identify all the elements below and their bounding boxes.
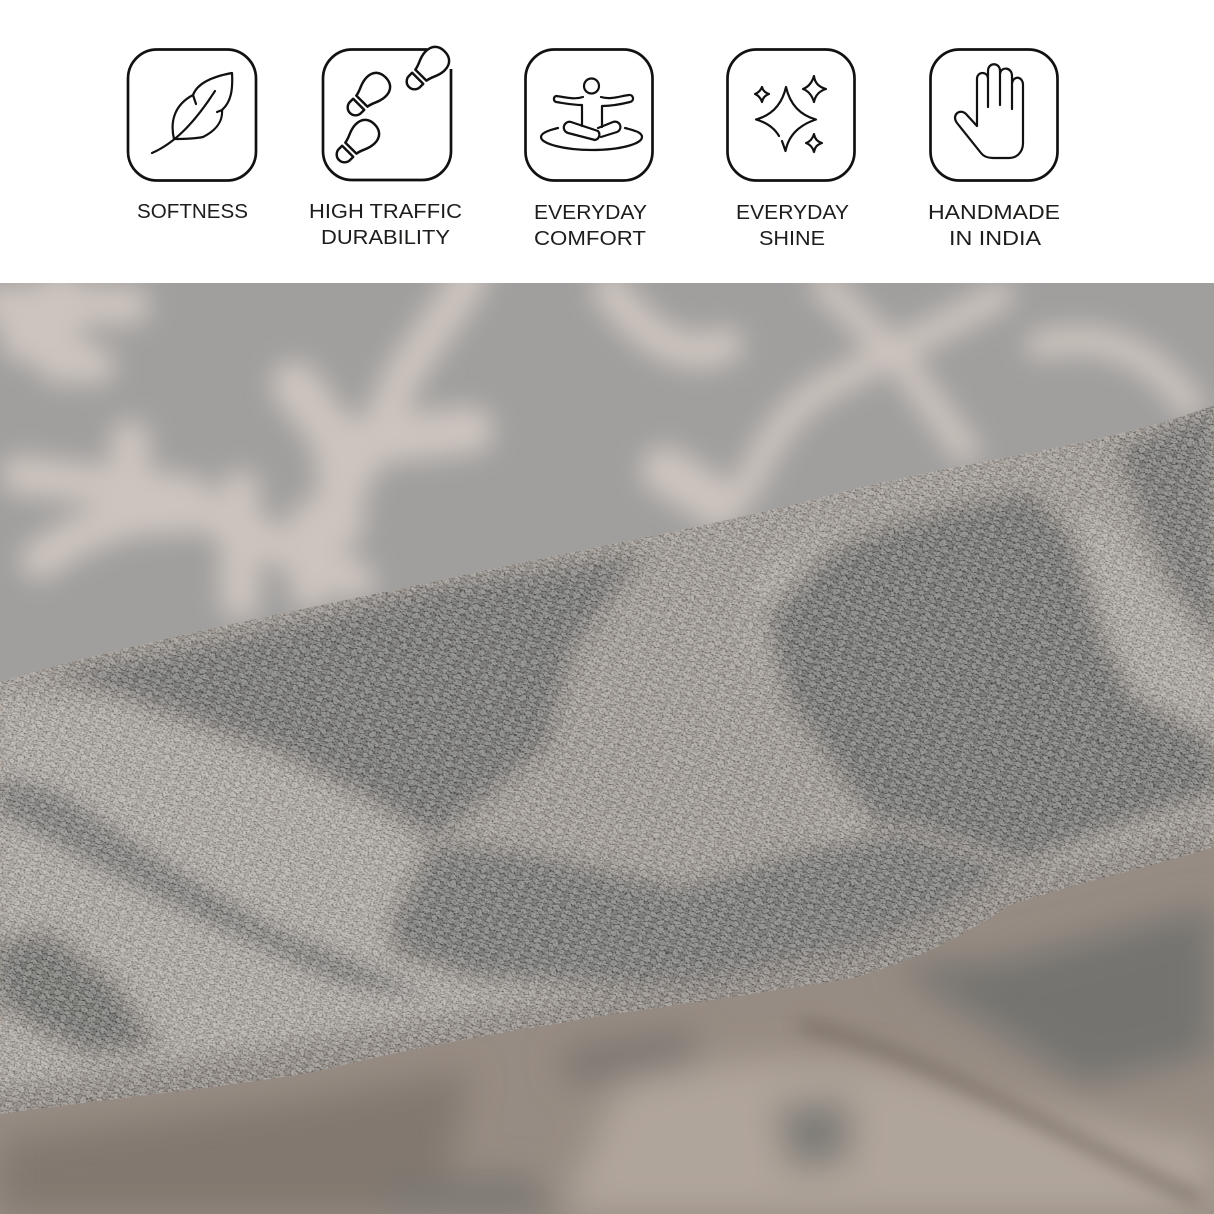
label: softness: SOFTNESS [137,200,248,223]
label: everyday comfort: EVERYDAY [534,201,647,224]
rug gray diagonal band [395,835,1010,985]
icon: meditating figure [541,78,642,150]
icon group: softness [128,50,256,223]
rug gray upper right [1120,410,1214,640]
icon: feather [152,73,232,153]
lower blurred fold [0,847,1214,1214]
label: high traffic durability: HIGH TRAFFIC [309,200,462,223]
icon frame: comfort [526,50,652,180]
knit stitches [0,406,1214,1114]
rug gray patch left [60,555,640,835]
knit fuzz speckle [0,405,1214,1114]
icon frame: handmade [930,50,1058,180]
icon frame: high traffic [323,50,451,180]
icon frame: softness [128,50,256,180]
label: handmade in india: HANDMADE [928,201,1060,224]
rug gray patches with taupe halo [0,410,1214,1050]
icon: footprints [329,42,454,170]
label: everyday shine [736,201,849,250]
background: blurred rug pattern [0,283,1214,682]
rug gray patch main right [770,495,1214,870]
rug gray stripe left [0,775,430,1000]
rug gray patch lower left [0,936,150,1050]
icon group: high traffic durability [309,42,462,249]
label: high traffic durability [309,200,462,249]
icon: sparkles [755,76,826,152]
icon group: handmade in india [928,50,1060,250]
label: everyday shine: SHINE [759,227,825,250]
label: handmade in india [928,201,1060,250]
icon frame: shine [728,50,854,180]
panel: photo of rolled rug [0,275,1214,1214]
label: everyday comfort: COMFORT [534,227,647,250]
rolled rug body [0,400,1214,1214]
icon group: everyday shine [728,50,854,250]
label: everyday shine: EVERYDAY [736,201,849,224]
label: everyday comfort [534,201,647,250]
taupe shading along lower edge of the roll [0,847,1214,1110]
rug beige areas [0,510,1214,1100]
label: high traffic durability: DURABILITY [321,226,450,249]
icon: hand [955,64,1023,158]
icon group: everyday comfort [526,50,652,250]
label: handmade in india: IN INDIA [949,227,1041,250]
